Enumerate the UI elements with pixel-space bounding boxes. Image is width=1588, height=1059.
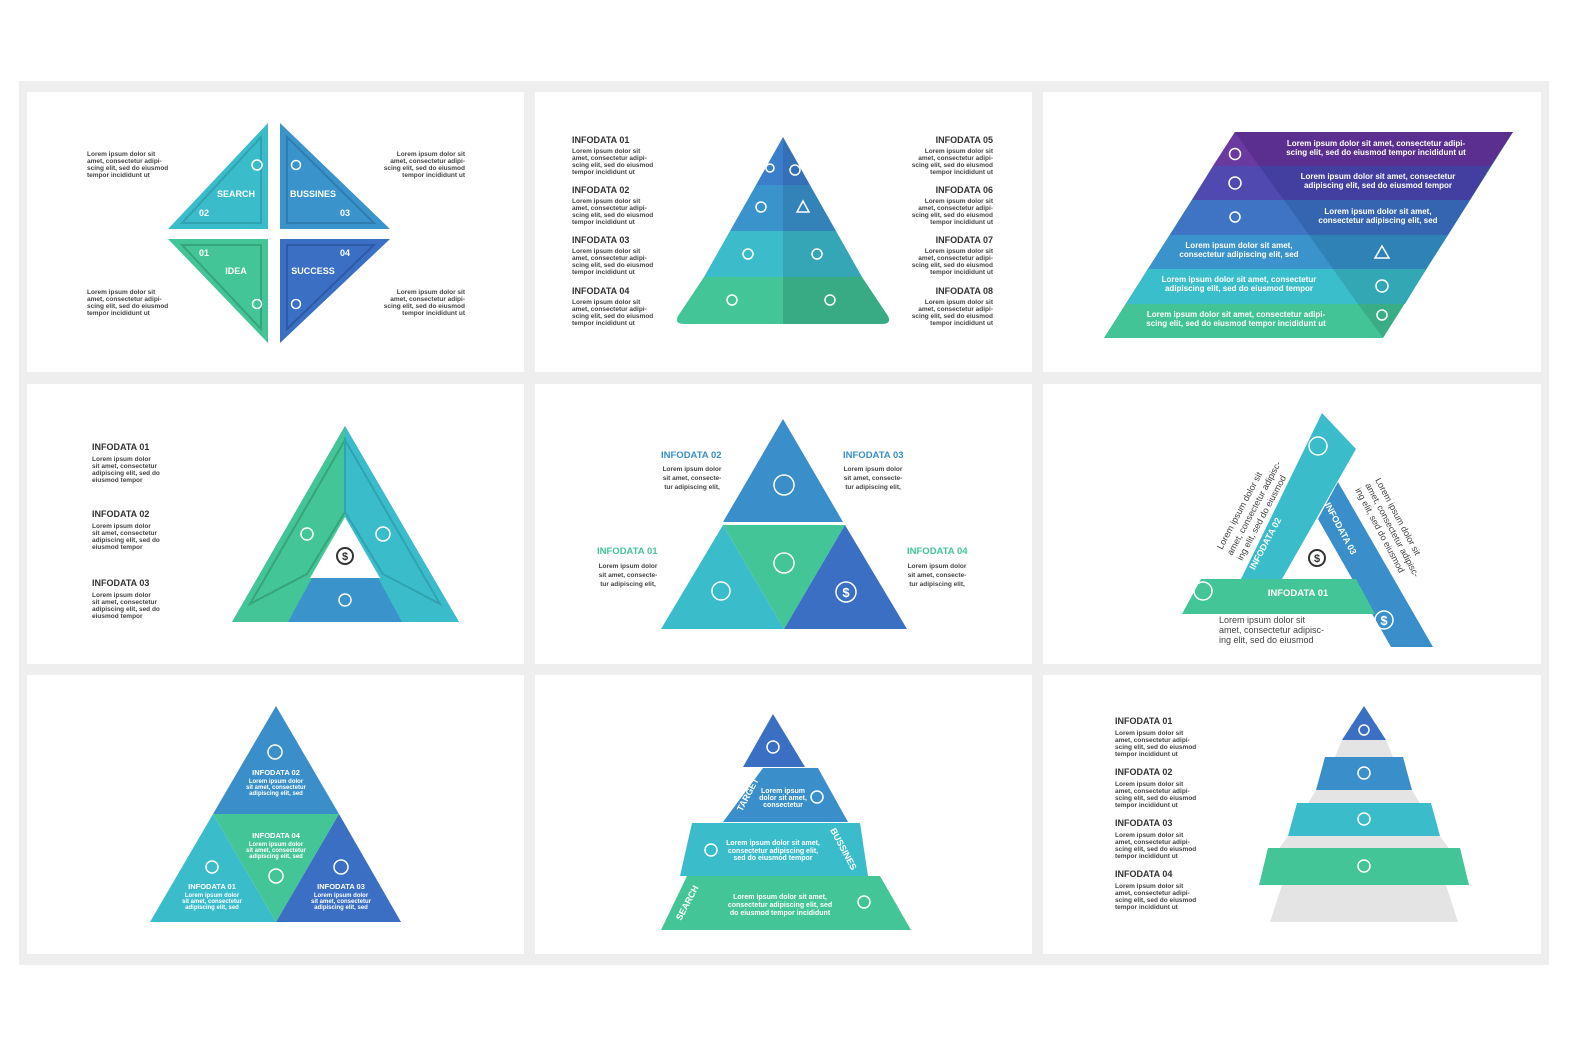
panel: ribbon triangle: ing elit, sed do eiusmod: [1219, 635, 1314, 645]
panel: four triangles composite: Lorem ipsum dolor: [844, 466, 903, 473]
panel: stacked pyramid: TARGET: [735, 776, 761, 813]
panel: subdivided triangle: adipiscing elit, sed: [314, 905, 368, 911]
panel: stacked pyramid: BUSSINES: [828, 826, 859, 872]
pyramid: [677, 137, 889, 324]
panel: ribbon triangle: amet, consectetur adipisc-: [1363, 481, 1421, 579]
panel: stepped pyramid: amet, consectetur adipi-: [1115, 788, 1190, 795]
panel: subdivided triangle: INFODATA 02: [252, 768, 300, 777]
panel: stacked pyramid: Lorem ipsum dolor sit amet,: [726, 840, 820, 847]
panel: stacked pyramid: do eiusmod tempor incididunt: [730, 910, 831, 917]
text: infodata 01-08: amet, consectetur adipi-: [572, 205, 647, 212]
triangle: success: [280, 239, 390, 343]
panel: stacked pyramid: Lorem ipsum dolor sit amet,: [733, 894, 827, 901]
text: infodata 01-08: scing elit, sed do eiusmod: [912, 262, 993, 269]
text blocks: scing elit, sed do eiusmod: [87, 303, 168, 310]
panel: ribbon triangle: amet, consectetur adipisc-: [1225, 459, 1283, 557]
text: infodata 01-08: INFODATA 03: [572, 235, 629, 245]
panel: ribbon triangle: Lorem ipsum dolor sit: [1215, 470, 1264, 551]
panel: stacked pyramid: dolor sit amet,: [759, 795, 807, 802]
text blocks: scing elit, sed do eiusmod: [384, 303, 465, 310]
panel: triangle frame with white centre: sit amet, consectetur: [92, 463, 157, 470]
panel: four triangles composite: $: [842, 585, 850, 600]
panel: stepped pyramid: Lorem ipsum dolor sit: [1115, 781, 1184, 788]
text: infodata 01-08: amet, consectetur adipi-: [918, 205, 993, 212]
panel: triangle frame with white centre: sit amet, consectetur: [92, 599, 157, 606]
panel: four triangles composite: sit amet, consecte-: [663, 475, 721, 482]
panel: triangle frame with white centre: eiusmod tempor: [92, 477, 143, 484]
text: infodata 01-08: INFODATA 06: [936, 185, 993, 195]
panel: stepped pyramid: tempor incididunt ut: [1115, 853, 1179, 860]
panel: subdivided triangle: sit amet, consectetur: [311, 899, 372, 905]
text: infodata 01-08: INFODATA 01: [572, 135, 629, 145]
panel: parallelogram bands: [1104, 132, 1513, 338]
panel: ribbon triangle: [1182, 413, 1433, 647]
panel: triangle frame with white centre: [92, 426, 459, 622]
panel: stacked pyramid: [661, 714, 911, 930]
triangle: idea: IDEA: [225, 266, 247, 276]
text: infodata 01-08: scing elit, sed do eiusmod: [572, 313, 653, 320]
panel: subdivided triangle: adipiscing elit, sed: [249, 854, 303, 860]
panel: parallelogram bands: scing elit, sed do eiusmod tempor incididunt ut: [1146, 319, 1326, 328]
text: infodata 01-08: amet, consectetur adipi-: [572, 255, 647, 262]
text blocks: Lorem ipsum dolor sit: [397, 289, 466, 296]
panel: four triangles composite: INFODATA 03: [843, 450, 904, 461]
panel: stepped pyramid: INFODATA 03: [1115, 818, 1172, 828]
panel: four triangles composite: sit amet, consecte-: [844, 475, 902, 482]
text: infodata 01-08: INFODATA 02: [572, 185, 629, 195]
panel: stepped pyramid: scing elit, sed do eiusmod: [1115, 897, 1196, 904]
panel: four triangles composite: Lorem ipsum dolor: [663, 466, 722, 473]
panel: triangle frame with white centre: INFODATA 02: [92, 509, 149, 519]
panel: triangle frame with white centre: adipiscing elit, sed do: [92, 606, 160, 613]
panel: four triangles diamond: [87, 123, 466, 343]
panel: stepped pyramid: tempor incididunt ut: [1115, 802, 1179, 809]
panel: parallelogram bands: consectetur adipiscing elit, sed: [1179, 250, 1299, 259]
panel: stepped pyramid: amet, consectetur adipi-: [1115, 839, 1190, 846]
text: infodata 01-08: scing elit, sed do eiusmod: [912, 162, 993, 169]
panel: parallelogram bands: Lorem ipsum dolor sit amet,: [1324, 207, 1432, 216]
text blocks: tempor incididunt ut: [402, 310, 466, 317]
panel: ribbon triangle: Lorem ipsum dolor sit: [1219, 615, 1306, 625]
triangle: search: SEARCH: [217, 189, 255, 199]
panel: parallelogram bands: Lorem ipsum dolor sit amet, consectetur adipi-: [1147, 310, 1325, 319]
panel: four triangles composite: tur adipiscing elit,: [664, 484, 720, 491]
panel: triangle frame with white centre: adipiscing elit, sed do: [92, 537, 160, 544]
panel: triangle frame with white centre: INFODATA 01: [92, 442, 149, 452]
panel: stepped pyramid: Lorem ipsum dolor sit: [1115, 883, 1184, 890]
panel: four triangles composite: tur adipiscing elit,: [845, 484, 901, 491]
panel: ribbon triangle: ing elit, sed do eiusmod: [1353, 486, 1406, 574]
panel: stacked pyramid: consectetur: [763, 802, 803, 809]
panel: parallelogram bands: Lorem ipsum dolor sit amet, consectetur: [1162, 275, 1316, 284]
panel: parallelogram bands: adipiscing elit, sed do eiusmod tempor: [1304, 181, 1452, 190]
panel: subdivided triangle: INFODATA 03: [317, 882, 365, 891]
panel: stepped pyramid: scing elit, sed do eiusmod: [1115, 795, 1196, 802]
panel: stepped pyramid: tempor incididunt ut: [1115, 904, 1179, 911]
panel: four triangles composite: sit amet, consecte-: [908, 572, 966, 579]
panel: four triangles composite: Lorem ipsum dolor: [599, 563, 658, 570]
panel: stepped pyramid: Lorem ipsum dolor sit: [1115, 730, 1184, 737]
panel: stepped pyramid: INFODATA 01: [1115, 716, 1172, 726]
triangle: success: 04: [340, 248, 350, 258]
text blocks: Lorem ipsum dolor sit: [397, 151, 466, 158]
text blocks: tempor incididunt ut: [402, 172, 466, 179]
text: infodata 01-08: [572, 135, 994, 327]
panel: triangle frame with white centre: eiusmod tempor: [92, 544, 143, 551]
panel: triangle frame with white centre: Lorem ipsum dolor: [92, 456, 151, 463]
panel: stacked pyramid: consectetur adipiscing elit, sed: [728, 902, 832, 909]
panel: subdivided triangle: Lorem ipsum dolor: [185, 893, 240, 899]
text: infodata 01-08: tempor incididunt ut: [572, 320, 636, 327]
panel: subdivided triangle: adipiscing elit, sed: [185, 905, 239, 911]
triangle: bussines: BUSSINES: [290, 189, 336, 199]
triangle: bussines: 03: [340, 208, 350, 218]
panel: four triangles composite: Lorem ipsum dolor: [908, 563, 967, 570]
text blocks: amet, consectetur adipi-: [87, 296, 162, 303]
panel: ribbon triangle: amet, consectetur adipisc-: [1219, 625, 1324, 635]
text: infodata 01-08: scing elit, sed do eiusmod: [572, 162, 653, 169]
text blocks: tempor incididunt ut: [87, 172, 151, 179]
panel: subdivided triangle: sit amet, consectetur: [182, 899, 243, 905]
text: infodata 01-08: INFODATA 07: [936, 235, 993, 245]
text: infodata 01-08: scing elit, sed do eiusmod: [912, 212, 993, 219]
text: infodata 01-08: tempor incididunt ut: [930, 219, 994, 226]
panel: subdivided triangle: sit amet, consectetur: [246, 785, 307, 791]
panel: triangle frame with white centre: INFODATA 03: [92, 578, 149, 588]
panel: subdivided triangle: Lorem ipsum dolor: [249, 842, 304, 848]
panel: stepped pyramid: amet, consectetur adipi-: [1115, 737, 1190, 744]
panel: four triangles composite: [597, 419, 968, 629]
panel: four triangles composite: INFODATA 02: [661, 450, 722, 461]
panel: stepped pyramid: scing elit, sed do eiusmod: [1115, 744, 1196, 751]
text blocks: tempor incididunt ut: [87, 310, 151, 317]
text blocks: Lorem ipsum dolor sit: [87, 151, 156, 158]
text blocks: Lorem ipsum dolor sit: [87, 289, 156, 296]
text blocks: scing elit, sed do eiusmod: [384, 165, 465, 172]
panel: stepped pyramid: INFODATA 04: [1115, 869, 1172, 879]
panel: ribbon triangle: ing elit, sed do eiusmod: [1235, 474, 1288, 562]
panel: stacked pyramid: SEARCH: [674, 884, 701, 922]
text: infodata 01-08: Lorem ipsum dolor sit: [572, 248, 641, 255]
text: infodata 01-08: tempor incididunt ut: [930, 169, 994, 176]
panel: ribbon triangle: Lorem ipsum dolor sit: [1373, 476, 1423, 557]
panel: ribbon triangle: INFODATA 03: [1323, 501, 1359, 556]
panel: stepped pyramid: Lorem ipsum dolor sit: [1115, 832, 1184, 839]
panel: parallelogram bands: Lorem ipsum dolor sit amet,: [1185, 241, 1293, 250]
text: infodata 01-08: amet, consectetur adipi-: [572, 155, 647, 162]
triangle: search: [168, 123, 268, 229]
panel: four triangles composite: tur adipiscing elit,: [909, 581, 965, 588]
panel: stacked pyramid: Lorem ipsum: [761, 788, 805, 795]
triangle: success: SUCCESS: [291, 266, 335, 276]
panel: parallelogram bands: scing elit, sed do eiusmod tempor incididunt ut: [1286, 148, 1466, 157]
panel: 8-part pyramid: [572, 135, 994, 327]
panel: triangle frame with white centre: sit amet, consectetur: [92, 530, 157, 537]
panel: parallelogram bands: adipiscing elit, sed do eiusmod tempor: [1165, 284, 1313, 293]
text: infodata 01-08: INFODATA 08: [936, 286, 993, 296]
panel: triangle frame with white centre: $: [342, 551, 348, 563]
panel: stepped pyramid: tempor incididunt ut: [1115, 751, 1179, 758]
triangle: idea: 01: [199, 248, 209, 258]
text: infodata 01-08: INFODATA 05: [936, 135, 993, 145]
text: infodata 01-08: tempor incididunt ut: [930, 269, 994, 276]
panel: stacked pyramid: consectetur adipiscing elit,: [728, 848, 818, 855]
panel: stepped pyramid: scing elit, sed do eiusmod: [1115, 846, 1196, 853]
panel: ribbon triangle: $: [1314, 553, 1320, 565]
panel: stepped pyramid: [1115, 706, 1469, 922]
text: infodata 01-08: amet, consectetur adipi-: [918, 255, 993, 262]
text: infodata 01-08: Lorem ipsum dolor sit: [572, 299, 641, 306]
panel: stepped pyramid: INFODATA 02: [1115, 767, 1172, 777]
text: infodata 01-08: INFODATA 04: [572, 286, 629, 296]
panel: stacked pyramid: sed do eiusmod tempor: [734, 855, 813, 862]
text: infodata 01-08: amet, consectetur adipi-: [918, 306, 993, 313]
text: infodata 01-08: scing elit, sed do eiusmod: [572, 212, 653, 219]
panel: parallelogram bands: consectetur adipiscing elit, sed: [1318, 216, 1438, 225]
panel: subdivided triangle: Lorem ipsum dolor: [249, 779, 304, 785]
panel: parallelogram bands: Lorem ipsum dolor sit amet, consectetur adipi-: [1287, 139, 1465, 148]
text: infodata 01-08: Lorem ipsum dolor sit: [572, 198, 641, 205]
text: infodata 01-08: Lorem ipsum dolor sit: [925, 148, 994, 155]
panel: ribbon triangle: INFODATA 02: [1247, 516, 1283, 571]
text: infodata 01-08: amet, consectetur adipi-: [918, 155, 993, 162]
panel: parallelogram bands: Lorem ipsum dolor sit amet, consectetur: [1301, 172, 1455, 181]
text: infodata 01-08: Lorem ipsum dolor sit: [925, 248, 994, 255]
panel: stepped pyramid: amet, consectetur adipi-: [1115, 890, 1190, 897]
text: infodata 01-08: tempor incididunt ut: [572, 169, 636, 176]
text blocks: amet, consectetur adipi-: [390, 158, 465, 165]
panel: subdivided triangle: Lorem ipsum dolor: [314, 893, 369, 899]
panel: four triangles composite: sit amet, consecte-: [599, 572, 657, 579]
panel: subdivided triangle: sit amet, consectetur: [246, 848, 307, 854]
text blocks: [87, 151, 466, 317]
panel: triangle frame with white centre: Lorem ipsum dolor: [92, 523, 151, 530]
text: infodata 01-08: tempor incididunt ut: [572, 219, 636, 226]
panel: subdivided triangle: adipiscing elit, sed: [249, 791, 303, 797]
panel: triangle frame with white centre: eiusmod tempor: [92, 613, 143, 620]
text: infodata 01-08: tempor incididunt ut: [572, 269, 636, 276]
text: infodata 01-08: tempor incididunt ut: [930, 320, 994, 327]
panel: triangle frame with white centre: Lorem ipsum dolor: [92, 592, 151, 599]
panel: four triangles composite: tur adipiscing elit,: [600, 581, 656, 588]
panel: subdivided triangle: [150, 706, 401, 922]
panel: triangle frame with white centre: adipiscing elit, sed do: [92, 470, 160, 477]
panel: four triangles composite: INFODATA 04: [907, 546, 968, 557]
panel: subdivided triangle: INFODATA 01: [188, 882, 236, 891]
triangle: search: 02: [199, 208, 209, 218]
text: infodata 01-08: Lorem ipsum dolor sit: [572, 148, 641, 155]
triangle: idea: [168, 239, 268, 343]
panel: subdivided triangle: INFODATA 04: [252, 831, 301, 840]
panel: four triangles composite: INFODATA 01: [597, 546, 658, 557]
triangle: bussines: [280, 123, 390, 229]
panel: ribbon triangle: INFODATA 01: [1268, 588, 1329, 599]
text blocks: amet, consectetur adipi-: [390, 296, 465, 303]
text: infodata 01-08: amet, consectetur adipi-: [572, 306, 647, 313]
panel: ribbon triangle: $: [1380, 613, 1388, 628]
text: infodata 01-08: scing elit, sed do eiusmod: [912, 313, 993, 320]
text: infodata 01-08: Lorem ipsum dolor sit: [925, 198, 994, 205]
text: infodata 01-08: scing elit, sed do eiusmod: [572, 262, 653, 269]
text: infodata 01-08: Lorem ipsum dolor sit: [925, 299, 994, 306]
text blocks: scing elit, sed do eiusmod: [87, 165, 168, 172]
text blocks: amet, consectetur adipi-: [87, 158, 162, 165]
